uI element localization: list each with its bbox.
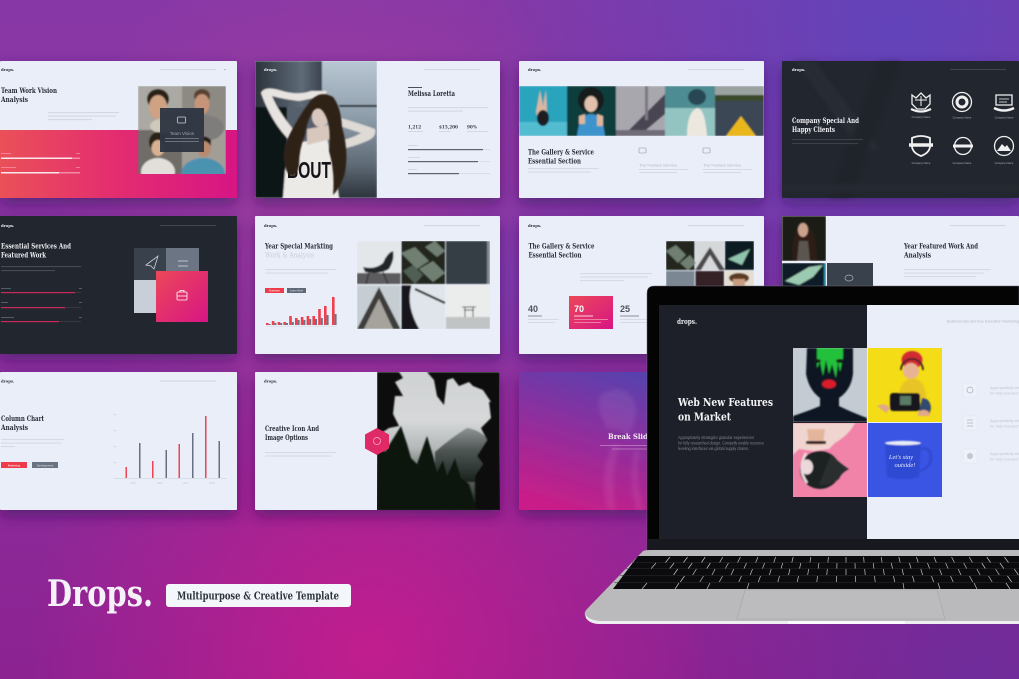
photo: woman in BOUT shirt (255, 61, 377, 198)
slide: Company Special And Happy Clients (782, 61, 1019, 198)
slide: Year Featured Work And Analysis (782, 216, 1019, 354)
description text (265, 269, 336, 274)
shirt (283, 139, 339, 198)
feature rows (963, 383, 1019, 463)
screen heading: on Market (678, 410, 732, 424)
photo grid (357, 241, 490, 329)
slide: Column Chart Analysis (0, 372, 237, 510)
statistic: 25 (620, 304, 647, 323)
photo strip (519, 86, 764, 136)
description text (904, 269, 991, 277)
screen description text: leveling interfaces via global supply chains. (678, 446, 749, 451)
badge captions: Company Name (995, 116, 1014, 120)
photo: portrait (782, 216, 826, 261)
buttons (265, 288, 306, 293)
heading: Year Special Markting (264, 242, 333, 250)
laptop screen: dark panel (659, 305, 867, 539)
arms (261, 89, 327, 139)
service tiles (134, 248, 208, 322)
buttons: Development (37, 463, 53, 467)
heading (1, 242, 71, 260)
keyboard (613, 556, 1019, 589)
tagline pill (166, 584, 351, 607)
laptop screen: dark panel: drops. (677, 317, 697, 326)
slide: Year Special Markting (255, 216, 500, 354)
heading (408, 87, 455, 98)
screen description text: Appropriately strategize granular experiences (678, 435, 755, 440)
slide: Year Special Markting: drops. (264, 223, 278, 228)
heading (792, 116, 859, 134)
tile: comment icon (827, 263, 873, 287)
photo grid (666, 241, 754, 286)
slide: Company Special And Happy Clients: drops. (792, 67, 806, 72)
slide: Essential Services And Featured Work (0, 216, 237, 354)
badge captions: Company Name (912, 161, 931, 165)
face (310, 102, 332, 128)
slide: Team Work Vision (0, 61, 237, 198)
progress bars (1, 288, 82, 322)
description text (408, 107, 488, 112)
badge captions: Company Name (995, 161, 1014, 165)
heading: Essential Services And (1, 242, 71, 250)
progress bars (1, 153, 80, 174)
buttons (1, 462, 58, 468)
description text (600, 445, 650, 450)
heading: Essential Section (528, 250, 582, 260)
stats (408, 124, 488, 132)
front notch (788, 621, 905, 624)
heading: Analysis (0, 95, 28, 104)
aerial background texture (782, 61, 1019, 198)
heading (0, 86, 57, 104)
heading: Melissa Loretta (408, 89, 455, 98)
slide: Creative Icon And Image Options: drops. (264, 378, 278, 384)
statistic: 40: 40 (528, 304, 538, 314)
mug script: outside! (895, 462, 915, 469)
photo: misty forest (377, 372, 500, 510)
heading: Image Options (265, 433, 308, 442)
slide: The Gallery & Service with statistics (519, 216, 764, 354)
heading: Analysis (0, 423, 28, 432)
heading: Column Chart (1, 414, 45, 423)
heading: Creative Icon And (265, 424, 319, 433)
stats: 90% (467, 124, 477, 130)
progress bars (408, 145, 490, 174)
slide: The Gallery & Service with statistics: drops. (528, 223, 542, 228)
feature: service one (639, 148, 688, 173)
mountain (435, 428, 487, 482)
laptop mockup (585, 286, 1019, 624)
heading: Break Slide (608, 432, 652, 441)
column chart: 2018 (209, 481, 215, 485)
heading (265, 424, 319, 442)
screen heading: Web New Features (677, 395, 773, 409)
feature: service two: The Feature Service (703, 162, 741, 168)
slide: Essential Services And Featured Work: drops. (1, 223, 15, 228)
slide: The Gallery & Service with photo strip (519, 61, 764, 198)
heading: Essential Section (528, 156, 581, 166)
heading: The Gallery & Service (528, 148, 594, 156)
description text (580, 273, 652, 281)
feature: service one: The Feature Service (639, 162, 677, 168)
heading: Year Featured Work And (903, 242, 978, 250)
heading: Analysis (903, 250, 931, 260)
badge captions: Company Name (912, 115, 931, 119)
photo: four team portraits (138, 86, 226, 174)
tagline pill: Multipurpose & Creative Template (177, 590, 339, 602)
photo: green paint face (793, 348, 867, 422)
slide: Melissa Loretta: drops. (264, 67, 278, 72)
slide: Column Chart Analysis: drops. (1, 378, 15, 384)
screen description text (678, 435, 764, 451)
brand title: Drops. (47, 573, 153, 615)
description text (265, 452, 336, 457)
bar chart (266, 297, 337, 327)
description text (528, 168, 599, 173)
column chart: 2016 (157, 481, 163, 485)
description text (1, 266, 81, 271)
heading: The Gallery & Service (528, 242, 595, 250)
column chart: 2015 (130, 481, 136, 485)
laptop lid and bezel (647, 286, 1019, 552)
heading (528, 242, 595, 260)
badge captions (912, 115, 1014, 165)
statistic: 70 highlight: 70 (574, 304, 584, 314)
badge captions: Company Name (953, 161, 972, 165)
laptop base (585, 550, 1019, 624)
trackpad (737, 590, 945, 619)
overlay card: Team Vision: Team Vision (170, 131, 195, 136)
stats: 1,212 (408, 124, 421, 130)
photo: woman in BOUT shirt: BOUT (287, 157, 331, 183)
slide: Creative Icon And Image Options (255, 372, 500, 510)
photo: baby with headphones (868, 348, 942, 422)
slide: Break Slide (519, 372, 764, 510)
heading: Work & Analysis (265, 252, 314, 260)
photo: blue mug (868, 423, 942, 497)
badge captions: Company Name (953, 116, 972, 120)
heading: Happy Clients (792, 125, 835, 134)
column chart: 2017 (183, 481, 189, 485)
column chart (114, 414, 227, 485)
front rim highlight (586, 615, 1019, 624)
slide: Team Work Vision: drops. (1, 67, 15, 72)
statistic: 25: 25 (620, 304, 630, 314)
screen heading (677, 395, 773, 424)
description text (48, 112, 119, 120)
heading (903, 242, 978, 260)
laptop screen: light panel: Business tips and free Education Marketing (947, 320, 1019, 324)
feature: service two (703, 148, 752, 173)
heading: Featured Work (1, 250, 46, 260)
mug script: Let's stay (888, 454, 913, 461)
heading: Company Special And (792, 116, 859, 125)
mug script (888, 454, 915, 469)
buttons: Learn More (290, 288, 304, 292)
heading (528, 148, 594, 166)
buttons: Marketing (8, 463, 21, 467)
stats: $15,200 (439, 124, 458, 130)
statistic: 70 highlight (569, 296, 613, 329)
hair (284, 94, 346, 195)
slide: The Gallery & Service with photo strip: drops. (528, 67, 542, 72)
slide: Melissa Loretta (255, 61, 500, 198)
description text (1, 439, 64, 447)
photo: dancer (782, 263, 826, 286)
description text (792, 139, 863, 144)
statistic: 40 (528, 304, 559, 323)
client badges (909, 92, 1014, 156)
icon: hexagon (365, 428, 389, 455)
key separators (642, 557, 1018, 589)
photo: upside-down head with headphones (793, 423, 867, 497)
buttons: Business (269, 288, 280, 292)
screen description text: for fully researched design. Compelly enable resource (678, 440, 764, 446)
laptop screen: light panel (867, 305, 1019, 539)
heading (0, 414, 45, 432)
heading (264, 242, 333, 260)
heading: Team Work Vision (1, 86, 57, 95)
